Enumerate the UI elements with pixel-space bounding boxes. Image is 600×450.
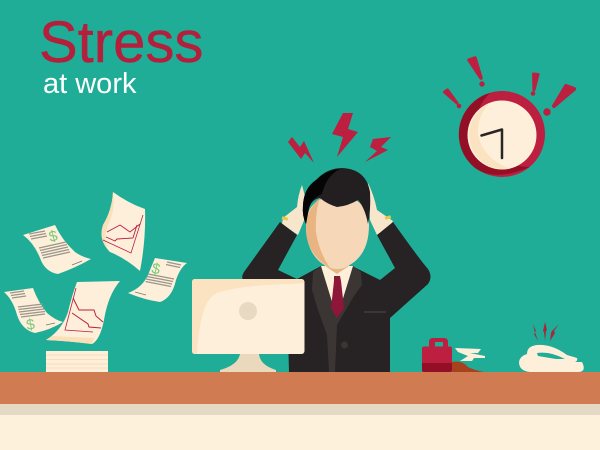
desk: [0, 372, 600, 450]
computer: logo: [239, 302, 257, 320]
paper: invoice right: [128, 258, 187, 302]
telephone: ringing bolts: [533, 322, 559, 341]
man: button and pocket: [341, 311, 386, 348]
man: face: [306, 195, 369, 269]
computer: [192, 279, 304, 372]
paper: invoice right: $: [150, 260, 162, 279]
telephone: body and handset: [519, 345, 584, 372]
briefcase: [422, 338, 452, 372]
papers: [4, 192, 187, 372]
title: at work: [43, 68, 137, 100]
icon: alarm clock: [459, 91, 545, 177]
title: Stress: [39, 10, 203, 75]
telephone: handset gap: [537, 353, 565, 359]
man: neck: [325, 255, 349, 274]
man: shirt: [321, 266, 353, 318]
icon: stress lightning bolts: [288, 113, 391, 163]
man: suit: [242, 222, 430, 372]
man: lapels: [312, 266, 362, 372]
paper: invoice bottom left: [4, 288, 63, 334]
computer: screen back: [192, 279, 304, 354]
man: tie: [331, 276, 344, 318]
man: hands: [282, 183, 393, 235]
computer: stand: [220, 354, 276, 372]
icon: alarm exclamation marks: [444, 58, 574, 115]
man: hair: [303, 168, 370, 224]
paper: invoice top left: [23, 225, 91, 274]
telephone: [519, 322, 584, 372]
paper stack: [46, 351, 108, 372]
man: [242, 168, 430, 372]
paper: invoice top left: $: [47, 227, 60, 246]
paper: chart bottom: [46, 281, 120, 344]
paper: invoice bottom left: $: [25, 316, 37, 334]
paper: chart top: [102, 192, 145, 271]
spilled coffee: [452, 348, 485, 372]
